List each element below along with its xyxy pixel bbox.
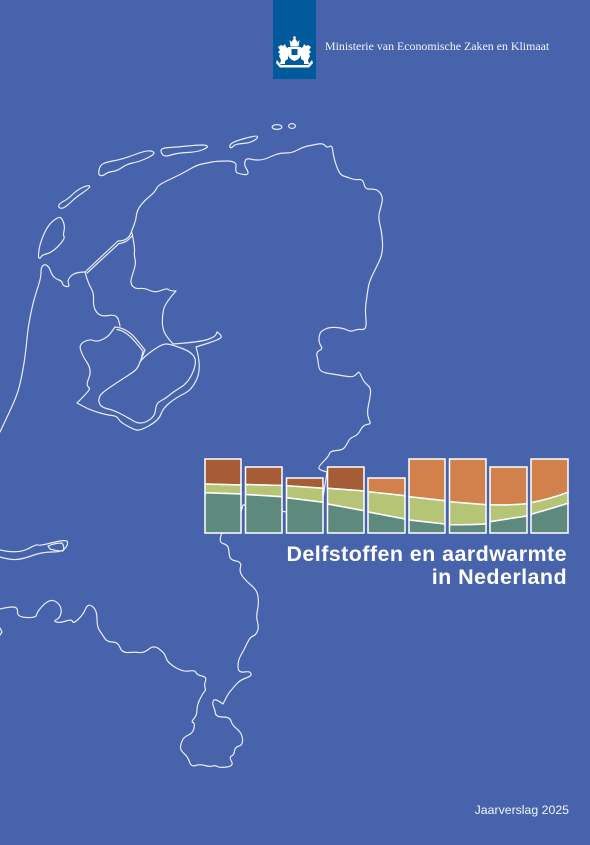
bar 6 — [409, 459, 445, 533]
title — [286, 542, 567, 589]
subtitle: annual report year: Jaarverslag 2025 — [475, 803, 569, 817]
bar 8 — [490, 467, 527, 533]
bar 4 — [328, 467, 364, 533]
map: IJsselmeer and Markermeer shoreline — [77, 233, 221, 430]
map: Westerschelde estuary — [0, 541, 68, 560]
bar 7 — [450, 459, 486, 533]
icon: coat of arms — [276, 36, 313, 68]
title: in Nederland — [432, 565, 567, 589]
bar 5 — [368, 478, 405, 533]
map: Wadden islands — [38, 124, 295, 258]
bar 9 — [531, 459, 568, 533]
bar 2 — [246, 467, 282, 533]
bar 3 — [286, 478, 323, 533]
title: Delfstoffen en aardwarmte — [286, 542, 567, 566]
logo bar: Rijksoverheid blue ribbon with crest — [273, 0, 316, 79]
map: mainland coast and borders — [0, 144, 383, 767]
bar 1 — [205, 459, 241, 533]
ministry name: Ministerie van Economische Zaken en Klimaat — [325, 39, 549, 53]
map: Flevoland polder — [99, 344, 195, 423]
